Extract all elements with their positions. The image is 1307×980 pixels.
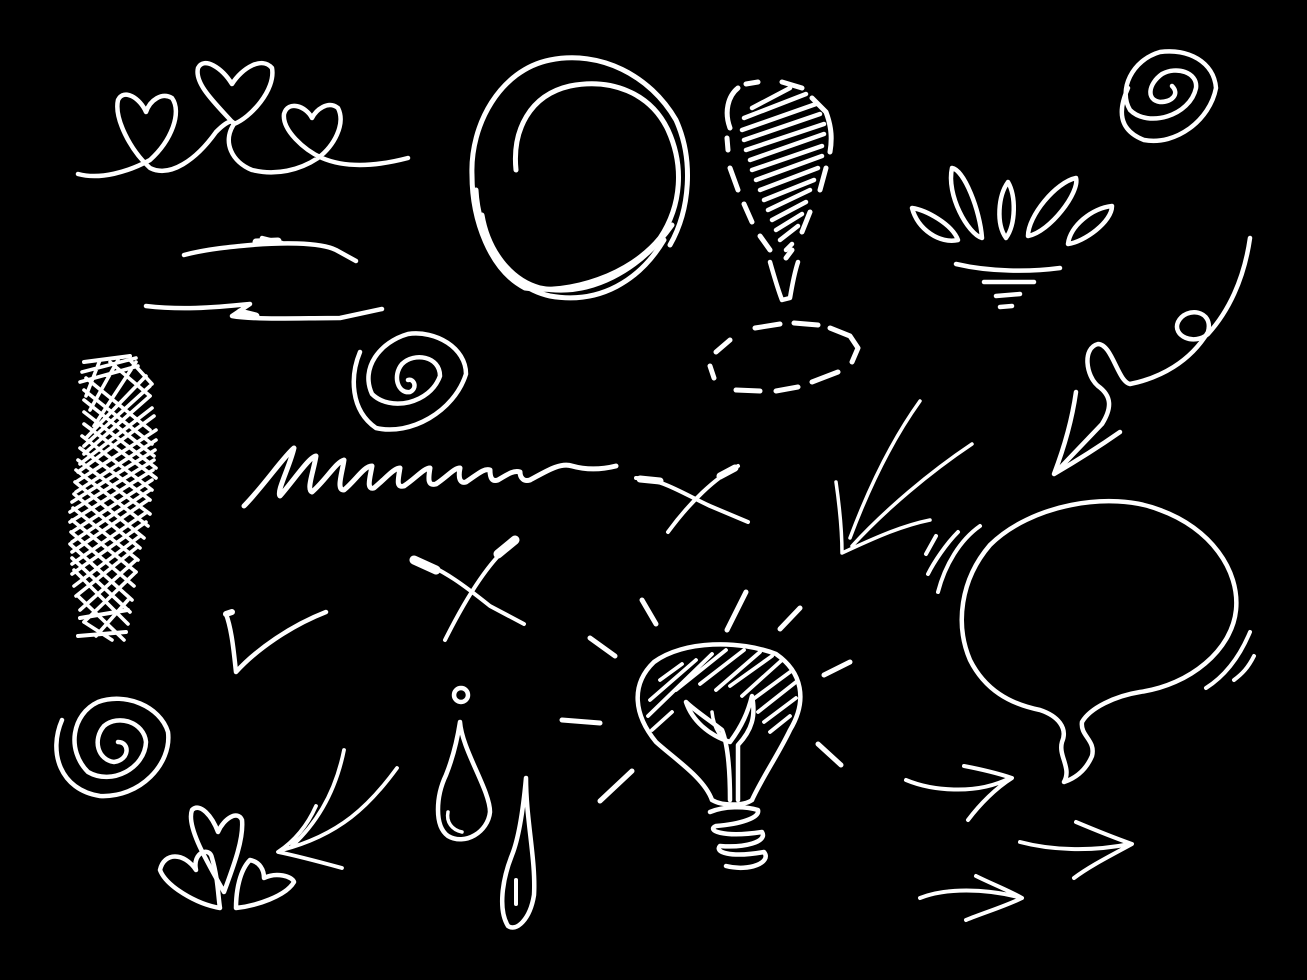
icon: three hearts cluster [160,808,294,908]
icon: long water drop [502,778,534,928]
icon: large cross [414,540,524,640]
icon: double-shaft arrow bottom-left [278,750,397,868]
icon: top cross [636,466,748,532]
icon: right arrow 1 [906,766,1012,820]
icon: double underline strokes [146,238,382,318]
icon: cross-hatch column [70,356,156,640]
icon: left spiral [354,333,466,430]
icon: looping arrow [1054,238,1250,474]
icon: right arrow 3 [920,876,1022,920]
icon: right arrow 2 [1020,822,1132,878]
icon: speech bubble [926,501,1254,782]
icon: dashed ellipse [710,323,858,391]
icon: check mark [226,612,326,672]
icon: scribble underline [244,448,616,506]
icon: top spiral [1122,51,1216,141]
icon: water drop with dot [438,688,490,839]
icon: long arrow pointing down-left [836,401,972,553]
icon: burst petals with base lines [912,168,1112,307]
icon: large scribble circle [472,58,687,298]
icon: bottom-left spiral [56,699,168,796]
icon: light bulb with rays [562,592,850,868]
icon: hatched exclamation mark [727,82,831,300]
icon: hearts flourish [78,63,408,176]
